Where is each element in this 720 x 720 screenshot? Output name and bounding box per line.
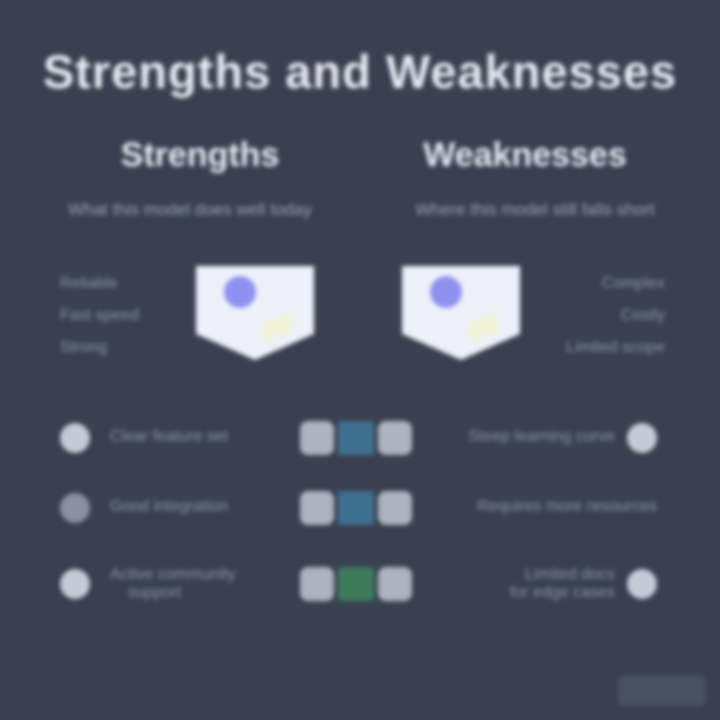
row 1: Steep learning curve [468,428,615,445]
text: strengths side: Strong [60,339,107,356]
text: weaknesses side: Complex [602,275,665,292]
subtitle: strengths: What this model does well today [68,200,312,219]
row 3: Active community [110,566,235,583]
text: weaknesses side: Limited scope [566,339,665,356]
row 1: Clear feature set [110,428,228,445]
text: strengths side: Fast speed [60,307,139,324]
text: weaknesses side [565,275,666,356]
title: Strengths and Weaknesses [43,45,677,98]
row 3: support [128,584,181,601]
row 2: Good integration [110,498,228,515]
icon: strengths shield [192,262,318,363]
text: strengths side [58,275,140,357]
row 3: Limited docs [525,566,615,583]
row 2 [58,488,658,528]
heading: weaknesses: Weaknesses [423,136,627,174]
text: strengths side: Reliable [60,275,118,292]
row 3: for edge cases [510,584,615,601]
icon: weaknesses shield [398,262,524,363]
badge: bottom right [618,676,706,706]
row 2: Requires more resources [477,498,657,515]
text: weaknesses side: Costly [621,307,665,324]
subtitle: weaknesses: Where this model still falls short [415,200,655,219]
heading: strengths: Strengths [121,136,279,174]
row 3 [56,564,660,604]
row 1 [56,418,660,458]
